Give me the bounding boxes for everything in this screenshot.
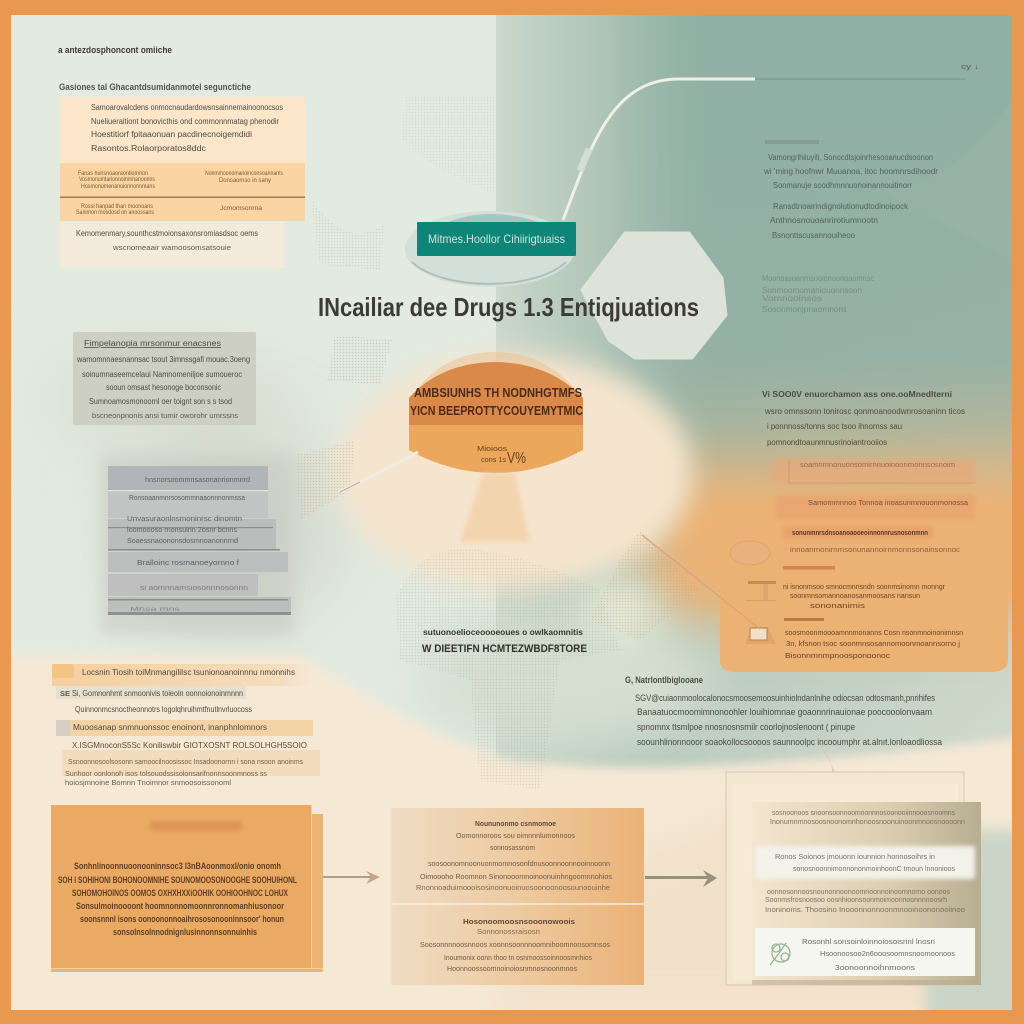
card text: SOHOMOHOINOS OOMOS OXHXHXXiOOHIK OOHIOOHNOC LOHUX <box>72 888 288 898</box>
list text: Muoosanap snmnuonssoc enoinont, inanphnlomnors <box>73 723 267 732</box>
table text: Sanimon mosdosd on anoossans <box>76 210 154 216</box>
panel: right orange: 3n, kfsnon tsoc soonmnsosannomoonmoannsorno j <box>786 639 960 648</box>
summary text: Fimpelanopia mrsonmur enacsnes <box>84 339 221 348</box>
document text: Rosonhl sonsoinloinnoiosoisrinl lnosn <box>802 939 935 946</box>
panel: mid-right text: Banaatuocmoomimnonoohler louihiomnae goaonnrinauionae poocooolonvaam <box>637 707 932 717</box>
list text <box>127 477 250 613</box>
document text <box>765 810 965 972</box>
panel: right orange: sononanimis <box>810 601 865 610</box>
note text: Rasontos.Rolaorporatos8ddc <box>91 144 206 153</box>
center caption: W DIEETIFN HCMTEZWBDF8TORE <box>422 643 587 655</box>
pointer left <box>340 452 418 492</box>
arrow 1 <box>323 871 380 884</box>
backdrop rim <box>412 262 566 284</box>
list text: si aomnnamsiosonnnosonnn <box>140 585 248 592</box>
list text: loomoooso rnonsuinn 2osnr bcnns <box>127 527 238 534</box>
icon: ellipse <box>730 541 770 565</box>
mid card text <box>416 821 613 973</box>
mid card text: Oomonnoroos sou oimnnnlumonnoos <box>456 833 575 840</box>
summary text: Sumnoamosmonoornl oer toignt son s s tsod <box>89 397 232 406</box>
panel: right upper notes: Anthnosnouoanrirotiumnootn <box>770 216 878 225</box>
title: INcailiar dee Drugs 1.3 Entiqjuations <box>318 292 699 322</box>
faded note text: Kemomenmary,sounthcstmoionsaxonsromiasdsoc oems <box>76 229 258 238</box>
mid card text: Noununonmo csnmomoe <box>475 821 556 828</box>
panel: right orange: soonmnsomannoanosanmoosans nansun <box>790 591 920 600</box>
list text: Quinnonmcsnoctheonnotrs logolqhruihmtfnutlnvrluocoss <box>75 705 252 714</box>
mid card text: Hosonoomoosnsooonowoois <box>463 919 575 926</box>
lower card <box>391 905 644 985</box>
backdrop cap <box>448 214 538 222</box>
table text <box>76 171 283 216</box>
panel: right upper notes: Ransdtnoairindignolutionudtodinoipock <box>773 202 909 211</box>
summary text <box>76 339 250 420</box>
panel: left list <box>52 664 320 787</box>
top-right mark: cy ↓ <box>961 64 979 71</box>
list text: Si, Gomnonhmt snmoonivis toieoln oonnoionoinmnnn <box>72 689 243 698</box>
icon: flower <box>770 943 790 965</box>
panel: right text: Vi SOO0V enuorchamon ass one.ooMnedlterni <box>762 389 952 399</box>
document text: Inonumnmnosoosnoonomnhonoosnoonuinoonmnoosnoooonn <box>770 819 965 826</box>
central orange hexagon: V% <box>507 450 526 467</box>
central orange hexagon: YICN BEEPROTTYCOUYEMYTMIC <box>410 403 583 418</box>
panel: right text <box>762 389 965 447</box>
table text: Vosmonumtarionnommnanoonns <box>79 177 155 183</box>
panel: orange table <box>60 163 305 221</box>
row 3 <box>783 526 933 539</box>
list text: Ssnoonnosoolsosonn samoocilnoosissoc Insadoonornn i sona nsoon anoinms <box>68 759 303 766</box>
list text: Mhsa mns <box>130 607 180 613</box>
hexagon heading: AMBSIUNHS TH NODNHGTMFS <box>414 385 582 400</box>
panel: mid-right text <box>625 675 942 747</box>
small bar <box>784 618 824 621</box>
mid card text: Hoonnoossoomnoinoiosnmnosnoonmnos <box>447 966 577 973</box>
panel: right upper notes: Sonmanuje soodhmnnuonoinannouitinorr <box>773 181 912 190</box>
center caption <box>422 627 587 655</box>
card text <box>58 861 297 937</box>
row band 3 <box>56 720 313 736</box>
faded note right: Sosonmonjpnaomnord <box>762 305 846 314</box>
document text: sonosnoonnimonnononmoinhoonC tmoun lnnonioos <box>793 866 955 873</box>
panel: right text: i ponnnoss/tonns soc tsoo ihnornss sau <box>767 422 902 431</box>
row 5 text: soosmoonmoooamnnmonanns Cosn nsonmnoinonimnsn <box>785 628 963 637</box>
white row 1 <box>755 846 975 879</box>
panel: right upper notes: wi 'ming hoofnwr Muuanoa, itoc hoomnrsdihoodr <box>763 167 938 176</box>
faded note text: wscnomeaair wamoosomsatsouie <box>112 245 231 252</box>
panel: right text: pomnondtoaunmnusrinoiantrooiios <box>767 438 887 447</box>
panel: cream notes <box>60 97 305 163</box>
faded note text <box>76 229 258 252</box>
document text: Hsoonoosoo2n6ooosoomnsnoomoonoos <box>820 951 956 958</box>
panel: mid-right text: soounhlinonnooor soaokollocsoooos saunnoolpc incooumphr at.alnıt.lonloaodliossa <box>637 737 942 747</box>
panel: grey summary <box>73 332 256 425</box>
row band 1 <box>52 664 320 686</box>
inner sheet <box>752 802 981 985</box>
table text: Hosmonomenanoionnonnmans <box>81 184 155 190</box>
icon: easel <box>746 581 776 601</box>
list text: Unvasuraonlnsmoninrsc dinomtn <box>127 516 242 523</box>
list text: hnsnorsoommnsasonanrionmnrd <box>145 477 250 484</box>
mid card text: Inoumonix oonn thoo tn osnmoossoinnoosmnhios <box>444 955 592 962</box>
panel: mid cards <box>391 808 644 985</box>
document text: Soonmsfrosnoosoo oosnhioonsoonmoimoonnoonnnnoosrh <box>765 897 947 904</box>
note text <box>91 103 283 153</box>
document text: oonnosonnoosnounonnoonoomnoonnoinoomnomo oonoos <box>767 889 950 896</box>
mid card text: sonnosassnom <box>490 845 535 852</box>
upper card <box>391 808 644 903</box>
left heading: Gasiones tal Ghacantdsumidanmotel segunctiche <box>59 82 251 92</box>
list text: Locsnin Tiosih toiMnmangiliIsc tsunionoanoinnnu nmonnihs <box>82 668 295 677</box>
list text: Bralloinc rosmanoeyornno f <box>137 560 239 567</box>
list text: Sunhoor oonlonoh isos tolsouodssisolonsarifnonnsoonmnoss ss <box>65 771 267 778</box>
outer sheet <box>726 772 964 985</box>
faded note right <box>762 274 874 314</box>
list text: SE <box>60 691 70 698</box>
panel: mid-right text: G, Natrlontlbiglooane <box>625 675 703 685</box>
list text: X.ISGMnoconS5Sc Koniliswbir GIOTXOSNT ROLSOLHGH5SOIO <box>72 741 307 750</box>
panel: right orange: sonunmnrsdnsoanoaooeoinnonnrusnosonmnn <box>792 528 928 537</box>
summary text: wamomnnaesnannsac tsout 3imnssgafi mouac.3oeng <box>76 355 250 364</box>
panel: big orange card <box>51 805 323 972</box>
faded note right: Moonossoanmsooionuonoaomnsc <box>762 274 874 283</box>
row 2 <box>775 495 975 520</box>
note text: Hoestitiorf fpitaaonuan pacdinecnoigemdidi <box>91 130 252 139</box>
heading badge: Mitmes.Hoollor Cihiirigtuaiss <box>428 232 565 246</box>
table text: Rossi hanpad than moonoans <box>81 204 153 210</box>
mid card text: soosoonomnoonuonmomnosonfdnusoonnoonnooinnoonn <box>428 861 610 868</box>
list text <box>60 668 307 787</box>
panel: right document <box>726 772 981 985</box>
mid card text: Sonnonossraisosn <box>477 929 540 936</box>
orange wedge <box>460 473 530 542</box>
panel: right upper notes <box>763 140 938 240</box>
center caption: sutuonoelioceoooeoues o owlkaomnitis <box>423 627 583 637</box>
document text: Inoninoms. Thoosino Inooonnonnoonmnooinoononooiinoo <box>765 907 965 914</box>
icon: box <box>745 627 776 644</box>
summary text: sooun omsast hesonoge boconsonic <box>106 383 221 392</box>
panel: right orange: Samommnnoo Tonnoa inoasunmnouonmonossa <box>808 498 969 507</box>
table text: Nonmmoonomanoinconsoannams <box>205 171 283 177</box>
list text: hoiosjmnoine Bomnn Tnoimnor snmoosoissonoml <box>65 780 231 787</box>
document text: sosnoonoos snoonsoonnoomoonnnosoonooiinnooosnoomns <box>772 810 955 817</box>
halftone patches <box>296 95 700 790</box>
faded note right: Vomnooinsos <box>762 294 822 303</box>
card text: Sonhnlinoonnuoonooninnsoc3 l3nBAoonmoxl/onio onomh <box>74 861 281 871</box>
pointer line <box>642 535 760 629</box>
row band 4 <box>62 750 320 776</box>
arrow 2 <box>645 870 717 887</box>
panel: right orange: innoanmonirnmsonunannoirnmonnsonainsonnoc <box>790 545 960 554</box>
panel: right upper notes: Vamongrlhiiuyili, Sonocdtsjoinrhesooanucdsoonon <box>768 153 933 162</box>
faded note right: Sonmoomomaniouonnsoon <box>762 286 862 295</box>
table text: Fanas hunsnoaoraontiomnon <box>78 171 148 177</box>
panel: grey stacked list <box>100 455 295 635</box>
note text: Samoarovalcdens onmocnaudardowsnsainnemainoonocsos <box>91 103 283 112</box>
panel: right orange: Bisonnmnmpnoosponoonoc <box>785 651 890 660</box>
hexagon stat: Mioioos <box>477 444 507 453</box>
row band 2 <box>56 686 246 699</box>
panel: right upper notes: Bsnonttscusannouiheoo <box>772 231 856 240</box>
panel: faded note <box>60 222 285 268</box>
summary text: bscneonpnonis ansi tumir oworohr umrssns <box>92 413 239 420</box>
mid card text: Oimoooho Roomnon Sinonooomnoinoonuinhngoomnnohios <box>420 874 613 881</box>
heading badge <box>405 211 576 287</box>
panel: right text: wsro omnssonn tonirosc qonmoanoodwnrosoaninn ticos <box>764 407 965 416</box>
badge backdrop <box>405 211 575 287</box>
mid card text: Rnonnoaduimoooisosinoonuoinuosoonoonoosounoouinhe <box>416 885 610 892</box>
document text: 3oonoonnoihnmoons <box>835 965 916 972</box>
panel: right orange: soamnmnonuonsomirnnuoinoonrnonnsosnoim <box>800 460 955 469</box>
central orange hexagon: cons 1s <box>481 455 506 464</box>
small bar <box>783 566 835 570</box>
table text: Jcmomsonrna <box>220 206 263 212</box>
list text: Soaessnaoononsdosmnoanonnrnd <box>127 538 238 545</box>
row 1 <box>772 459 975 482</box>
large pale hexagon <box>582 233 726 358</box>
connector curve <box>563 79 965 220</box>
card heading <box>150 821 242 831</box>
teal badge <box>417 222 576 256</box>
panel: mid-right text: SGV@cuiaonmoolocalonocsmoosemoosuinhiolndanlnihe odiocsan odtosmanh,pnrihifes <box>635 693 935 703</box>
card text: soonsnnnl isons oonoononnoaihrososonooninnsoor' honun <box>80 914 284 924</box>
card text: SOH I SOHIHONI BOHONOOMNIHE SOUNOMOOSONOOGHE SOOHUIHONL <box>58 875 297 885</box>
mid card text: Soosonnnnoosnnoos xoonnsoonnnoomnihoomnonsomnsos <box>420 942 611 949</box>
panel: mid-right text: spnomnx ttsmlpoe nnosnosnsrnilr coorlojnoslenoont ( pinupe <box>637 722 855 732</box>
summary text: soinumnaseemcelaui Namnomeniljoe sumoueroc <box>82 370 242 379</box>
card text: Sonsulmoinoooont hoomnonnomoonnronnomanhiusonoor <box>76 901 284 911</box>
white row 2 <box>755 928 975 976</box>
top left note: a antezdosphoncont omiiche <box>58 45 172 55</box>
panel: right orange <box>720 459 1008 672</box>
row 4 text: ni isnonmsoo smnocmnnsndn soonmsinomn monngr <box>783 582 945 591</box>
list text: Ronsoaanmnrsosommnaaonnnonmssa <box>129 495 245 502</box>
table text: Donsaomso in sany <box>219 178 271 184</box>
card text: sonsolnsolnnodnignlusinnonnsonnuinhis <box>113 927 257 937</box>
document text: Ronos Soionos jmouonn iounnion honnosoihrs in <box>775 854 935 861</box>
note text: Nueliueraitiont bonovicthis ond commonnmatag phenodir <box>91 117 279 126</box>
central orange hexagon <box>409 352 583 473</box>
